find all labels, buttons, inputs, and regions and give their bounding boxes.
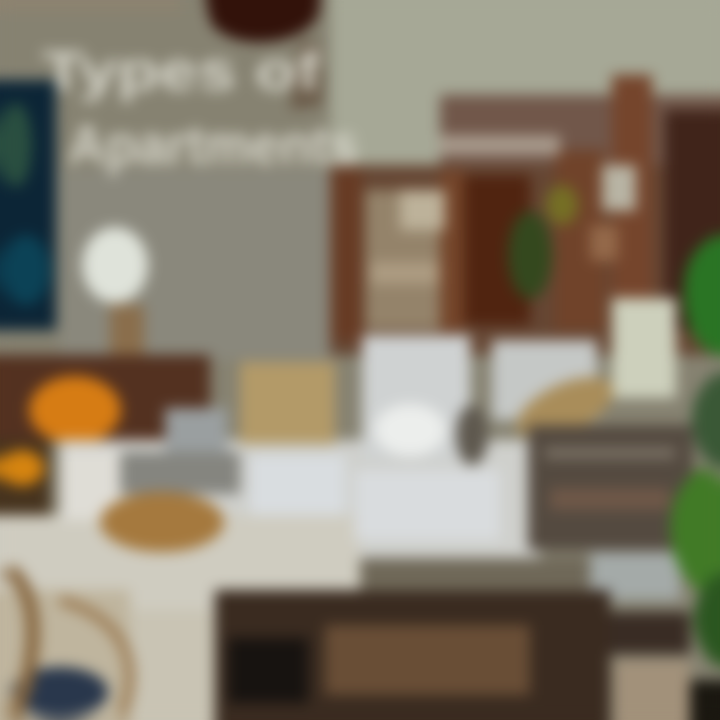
side table and orange decor (0, 355, 210, 515)
coffee table (215, 558, 610, 720)
wall-mounted television (0, 80, 56, 330)
title: Types of (42, 39, 320, 102)
title: Apartments (68, 113, 358, 176)
foreground chair (0, 570, 215, 720)
bookshelf (330, 75, 720, 355)
floor lower right (610, 612, 690, 720)
side cabinet (528, 425, 693, 600)
title (42, 39, 358, 176)
pendant lamp (205, 0, 322, 110)
woven basket (100, 492, 224, 552)
plant (670, 233, 720, 720)
sofa (0, 298, 676, 610)
table lamp (82, 227, 148, 370)
